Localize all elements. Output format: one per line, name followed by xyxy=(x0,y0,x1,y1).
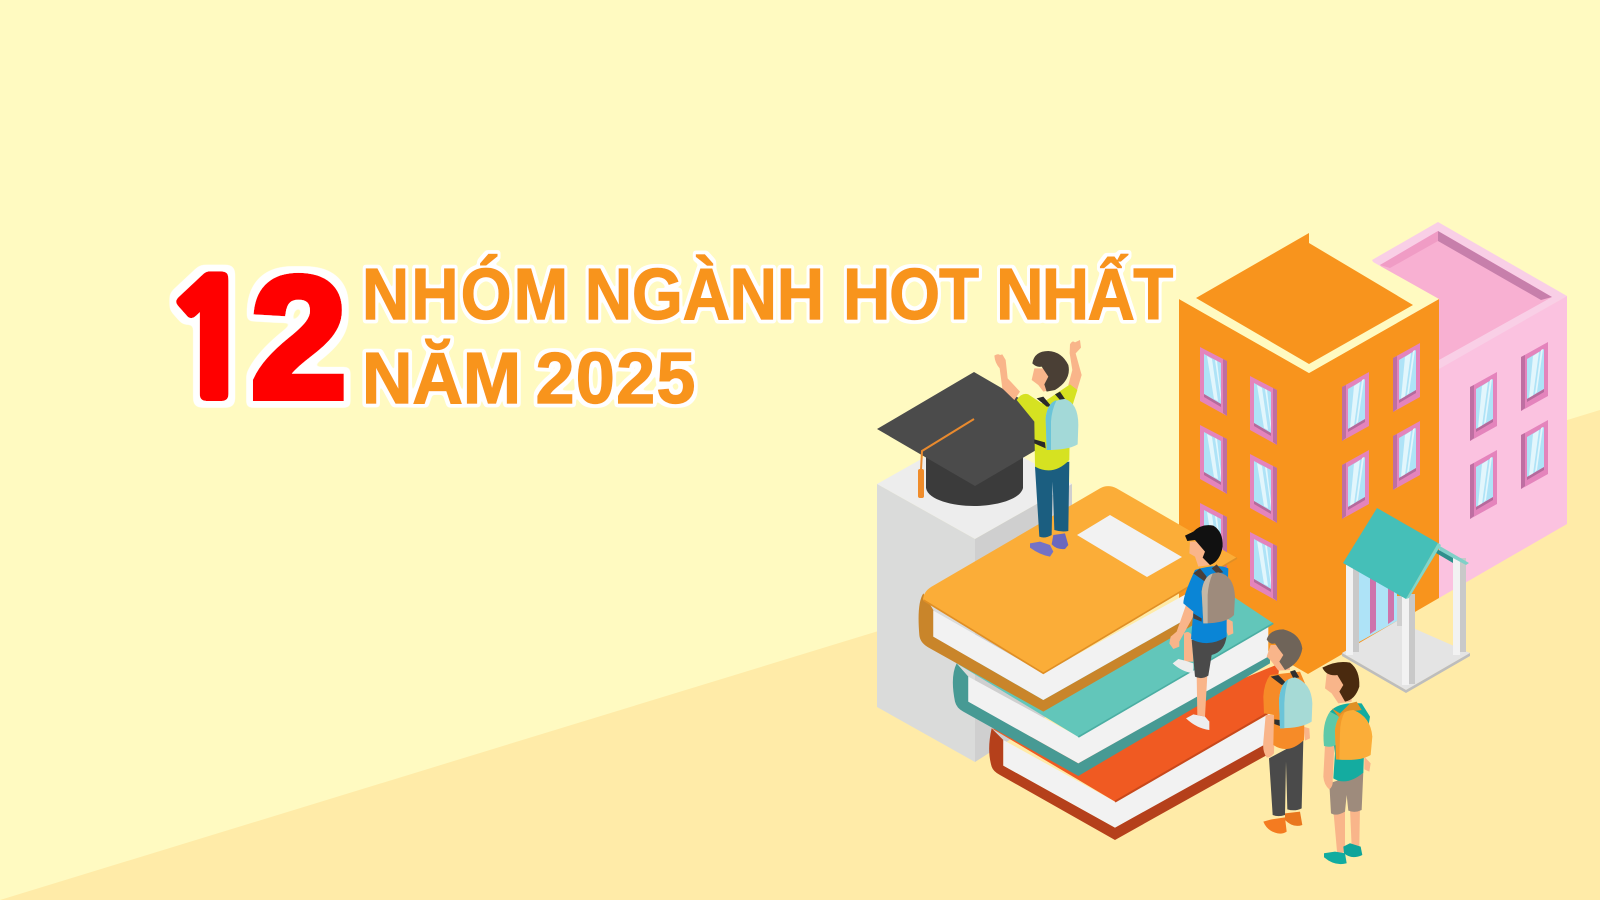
orange building windows right face xyxy=(1342,343,1420,519)
student 4 near leg xyxy=(1333,810,1345,855)
graduation cap xyxy=(877,372,1072,506)
student 4 far arm xyxy=(1364,757,1371,772)
student 4 face xyxy=(1325,673,1352,703)
pink building windows xyxy=(1470,342,1548,519)
student 3 xyxy=(1263,629,1312,834)
hair xyxy=(1185,525,1223,565)
orange building windows left face xyxy=(1200,347,1277,601)
title number 12: 1 xyxy=(163,262,259,420)
back shoe xyxy=(1173,659,1193,673)
face xyxy=(1189,542,1210,567)
student 2 climbing books xyxy=(1169,525,1235,730)
trousers xyxy=(1035,462,1069,538)
face xyxy=(1032,368,1050,392)
red book pages xyxy=(1003,713,1270,828)
near arm xyxy=(1169,605,1195,649)
students 3 and 4 standing xyxy=(1263,629,1372,864)
portico roof xyxy=(1343,508,1438,599)
book stack xyxy=(919,486,1280,840)
pink building roof floor xyxy=(1380,231,1552,360)
backpack edge xyxy=(1046,400,1057,450)
pink building wall xyxy=(1439,296,1567,598)
title line 2: NĂM xyxy=(362,339,521,419)
red book cover xyxy=(992,663,1280,802)
title line 1: NHẤT xyxy=(996,254,1173,335)
student 3 far arm xyxy=(1303,727,1310,741)
title line 2: 2025 xyxy=(536,339,697,419)
right arm xyxy=(1068,340,1082,392)
pink building roof rim xyxy=(1372,222,1567,370)
shorts xyxy=(1192,636,1227,678)
orange book back cover xyxy=(919,593,1193,712)
student 4 backpack xyxy=(1335,710,1372,760)
shirt xyxy=(1017,384,1077,470)
orange book pages xyxy=(933,590,1193,700)
portico door glass xyxy=(1359,555,1397,642)
student 1 waving on book xyxy=(994,340,1082,557)
title line 1: NHÓM xyxy=(362,254,570,335)
orange building roof cream frame xyxy=(1179,226,1439,373)
pink building xyxy=(1372,222,1567,598)
student 4 sleeve xyxy=(1323,712,1339,747)
student 4 hair xyxy=(1322,662,1359,702)
title line 1: NGÀNH xyxy=(585,254,824,335)
raised leg xyxy=(1184,632,1193,662)
portico floor edge xyxy=(1342,653,1470,693)
background: diagonal floor xyxy=(0,410,1600,900)
orange cover edge xyxy=(923,558,1237,673)
teal book pages xyxy=(968,627,1268,763)
front shoe xyxy=(1186,714,1209,730)
teal book cover xyxy=(957,597,1273,737)
student 3 backpack edge xyxy=(1279,679,1288,728)
orange building roof xyxy=(1196,233,1413,364)
portico door frames xyxy=(1370,560,1394,634)
orange building xyxy=(1179,226,1439,674)
backpack straps xyxy=(1034,392,1065,448)
portico back column xyxy=(1397,596,1402,626)
student 4 straps xyxy=(1332,702,1362,718)
pedestal xyxy=(877,430,1072,762)
student 3 straps xyxy=(1271,670,1299,726)
cap tassel xyxy=(918,469,924,498)
portico front column xyxy=(1402,594,1415,685)
student 3 backpack xyxy=(1279,677,1312,728)
student 4 shorts xyxy=(1329,772,1363,815)
student 3 front shoe xyxy=(1263,817,1287,834)
student 4 backpack edge xyxy=(1335,712,1345,759)
student 3 face xyxy=(1267,645,1290,671)
back shoe xyxy=(1052,533,1068,549)
orange building walls xyxy=(1179,299,1439,674)
portico left column xyxy=(1346,565,1359,655)
orange book xyxy=(919,486,1237,712)
hair xyxy=(1032,351,1069,392)
far arm xyxy=(1226,618,1233,636)
front shoe xyxy=(1030,542,1053,557)
backpack straps xyxy=(1193,564,1223,622)
orange book cover xyxy=(923,486,1237,673)
cap tassel cord xyxy=(921,419,974,470)
backpack xyxy=(1046,399,1078,450)
cap base xyxy=(926,445,1023,506)
title xyxy=(163,242,1173,434)
student 4 back shoe xyxy=(1343,843,1362,857)
teal book back cover xyxy=(953,655,1270,776)
red book back cover xyxy=(989,728,1270,840)
student 3 trousers xyxy=(1269,740,1303,816)
pink roof inner wall right xyxy=(1438,231,1552,300)
front leg xyxy=(1197,675,1207,717)
portico beam xyxy=(1438,545,1469,565)
pedestal left face xyxy=(877,484,975,762)
portico floor xyxy=(1342,621,1470,690)
backpack edge xyxy=(1202,573,1213,623)
pedestal top xyxy=(877,430,1072,539)
title line 1: HOT xyxy=(843,254,979,335)
portico entrance xyxy=(1342,508,1470,693)
title number 12: 2 xyxy=(251,242,347,434)
shirt xyxy=(1183,566,1228,643)
cap board xyxy=(877,372,1072,486)
student 4 near arm xyxy=(1323,745,1334,789)
paper sheet on book xyxy=(1077,515,1182,577)
portico right column xyxy=(1453,558,1466,655)
student 4 front shoe xyxy=(1324,852,1347,864)
student 3 back shoe xyxy=(1285,812,1302,826)
student 3 near arm xyxy=(1263,715,1275,757)
student 3 shirt xyxy=(1263,672,1305,749)
red book xyxy=(989,663,1280,840)
teal cover edge xyxy=(1078,623,1273,737)
teal book xyxy=(953,597,1273,776)
student 4 shirt xyxy=(1330,703,1370,781)
pedestal right face xyxy=(975,484,1072,762)
student 4 far leg xyxy=(1350,807,1360,847)
left arm xyxy=(994,354,1020,400)
red cover edge xyxy=(1115,710,1273,802)
backpack xyxy=(1202,572,1235,623)
student 4 xyxy=(1322,662,1372,864)
student 3 hair xyxy=(1267,629,1302,670)
pink roof inner wall left xyxy=(1380,231,1438,268)
